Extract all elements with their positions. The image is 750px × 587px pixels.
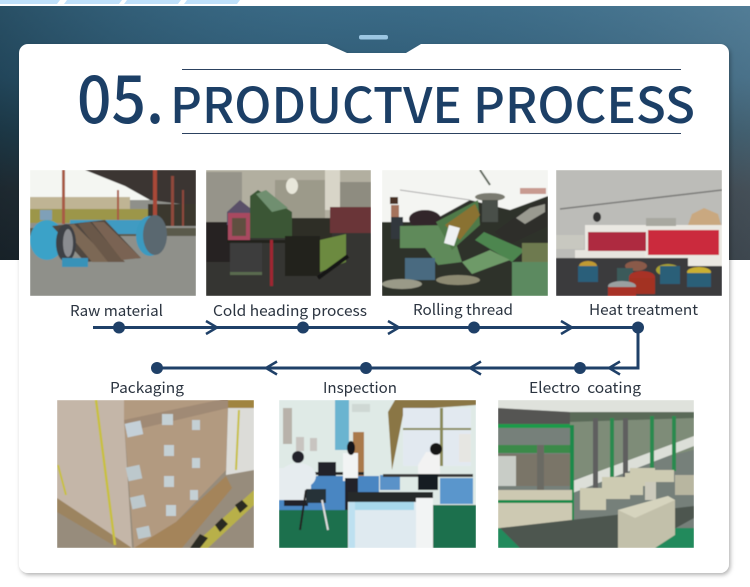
photo: heat treatment bbox=[556, 170, 722, 296]
label: packaging: Packaging bbox=[110, 377, 185, 398]
label: cold heading: Cold heading process bbox=[213, 300, 367, 321]
label: electro coating: Electro coating bbox=[529, 377, 642, 398]
photo: electro coating bbox=[498, 400, 694, 548]
photo: packaging bbox=[57, 398, 254, 548]
textured blue banner background bbox=[0, 6, 750, 260]
title rule bottom bbox=[182, 133, 681, 134]
step labels bbox=[70, 299, 698, 398]
notch pill bbox=[359, 35, 388, 40]
arrowheads back bbox=[266, 362, 620, 374]
title rule top bbox=[182, 69, 681, 70]
title bbox=[77, 47, 695, 143]
arrowheads forward bbox=[206, 321, 572, 334]
photo: cold heading bbox=[206, 170, 371, 296]
flow line: process timeline bbox=[93, 321, 644, 374]
title number: 05. bbox=[77, 47, 164, 143]
photo: raw material bbox=[30, 170, 196, 296]
step dots bbox=[113, 322, 644, 374]
photo: rolling thread bbox=[382, 170, 548, 296]
label: rolling thread: Rolling thread bbox=[413, 299, 513, 320]
upper path bbox=[93, 328, 638, 368]
title text: PRODUCTVE PROCESS bbox=[170, 67, 695, 138]
label: raw material: Raw material bbox=[70, 300, 163, 321]
top stripe decoration bbox=[0, 0, 240, 4]
label: inspection: Inspection bbox=[323, 377, 397, 398]
label: heat treatment: Heat treatment bbox=[589, 299, 698, 320]
photo: inspection bbox=[279, 400, 476, 548]
